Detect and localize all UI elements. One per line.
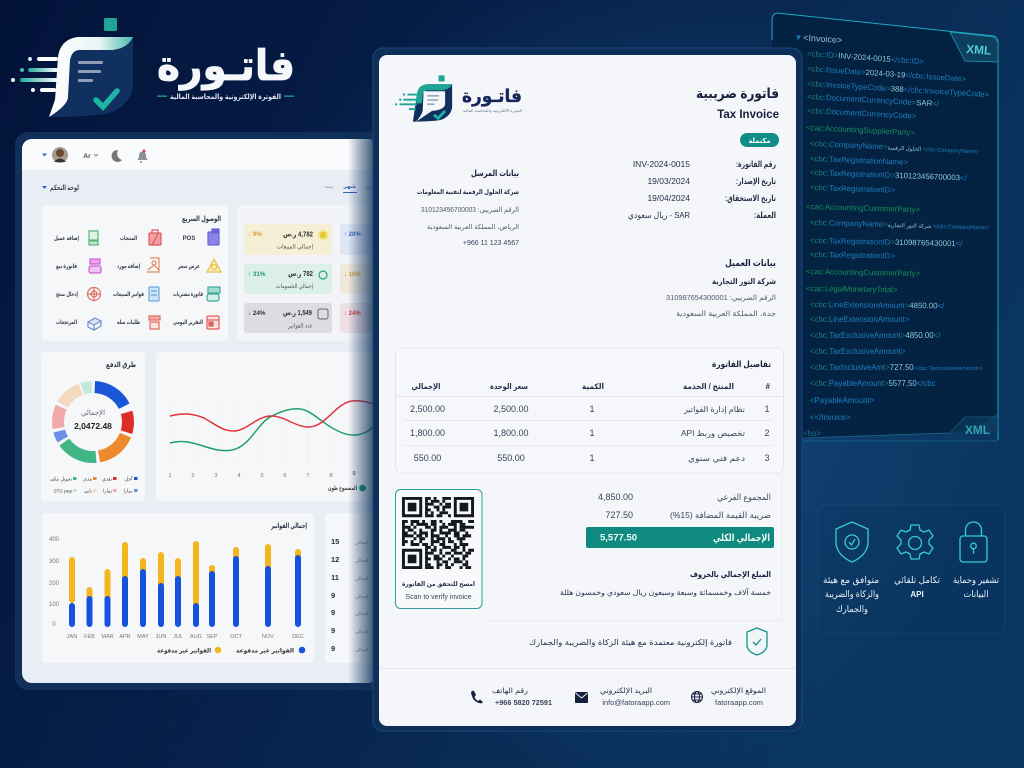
customer details: شركة النور التجارية xyxy=(712,277,776,286)
x axis months: APR xyxy=(119,634,131,640)
contact: phone xyxy=(471,686,552,707)
dashboard title row: سنة xyxy=(325,184,333,190)
xml tag bottom: XML xyxy=(965,423,990,437)
y axis xyxy=(49,537,60,628)
stat: total discounts: إجمالي الخصومات xyxy=(276,283,313,290)
chart x axis labels: 8 xyxy=(329,473,333,479)
wordmark: فاتـورة xyxy=(157,42,295,91)
x axis months: OCT xyxy=(230,634,242,640)
invoice items table: 1 xyxy=(589,404,595,414)
chart x axis labels: 1 xyxy=(168,473,172,479)
chart x axis labels: 7 xyxy=(306,473,310,479)
xml code lines: <cbc:TaxRegistrationName> xyxy=(810,154,909,167)
xml code lines: <cbc:CompanyName>شركة النور التجارية </cbc:CompanyName> xyxy=(810,218,989,231)
panel: quick access: الوصول السريع xyxy=(182,214,221,223)
stat: second column: ↓ 24% xyxy=(344,311,361,317)
y axis: 400 xyxy=(49,537,60,543)
customer details xyxy=(666,258,776,318)
status badge xyxy=(740,133,779,147)
panel: top customers list: 9 xyxy=(331,626,335,635)
y axis: 0 xyxy=(52,622,56,628)
panel: quick access: إضافة عميل xyxy=(54,235,79,242)
bar legend: الفواتير غير مدفوعة xyxy=(157,648,211,654)
invoice items table: سعر الوحدة xyxy=(490,382,528,391)
xml code lines: <cbc:IssueDate>2024-03-19</cbc:IssueDate> xyxy=(807,64,967,84)
compliance note xyxy=(529,628,767,655)
xml code lines: <cbc:LineExtensionAmount>4850.00</ xyxy=(810,300,945,310)
feature: zatca compliance: والزكاة والضريبة xyxy=(825,589,879,599)
stat: invoice count xyxy=(244,303,332,333)
invoice items table: 1 xyxy=(589,428,595,438)
invoice logo: فاتـورة xyxy=(462,86,522,107)
feature: zatca compliance: والجمارك xyxy=(836,604,868,614)
panel: security features xyxy=(818,505,1005,633)
xml code lines: <</Invoice> xyxy=(810,413,851,422)
stat: second column: ↑ 20% xyxy=(344,232,361,238)
chart x axis labels: 3 xyxy=(214,473,218,479)
customer details: الرقم الضريبي: 310987654300001 xyxy=(666,293,776,302)
stat: invoice count: 1,549 ر.س xyxy=(283,308,312,317)
qr code box: Scan to verify invoice xyxy=(405,594,472,601)
grand total bar: 5,577.50 xyxy=(600,532,637,542)
invoice items table: 1 xyxy=(764,404,770,414)
stat: total discounts xyxy=(244,264,332,294)
xml code lines: <cbc:TaxExclusiveAmount> xyxy=(810,347,906,356)
feature: zatca compliance xyxy=(823,522,879,614)
contact: website xyxy=(692,686,766,707)
panel: top customers list: 9 xyxy=(331,591,335,600)
xml code lines: <cac:AccountingSupplierParty> xyxy=(806,123,915,137)
y axis: 300 xyxy=(49,559,60,565)
x axis months: JUN xyxy=(156,634,166,640)
xml code lines: <cbc:TaxExclusiveAmount>4850.00</ xyxy=(810,331,941,340)
compliance note: فاتورة إلكترونية معتمدة مع هيئة الزكاة والضريبة والجمارك xyxy=(529,638,732,648)
panel: top customers list: إجمالي xyxy=(355,558,368,564)
x axis months: MAY xyxy=(137,634,149,640)
y axis: 200 xyxy=(49,581,60,587)
xml code lines: <cbc:PayableAmount>5577.50</cbc xyxy=(810,379,936,388)
invoice meta: رقم الفاتورة: xyxy=(736,159,776,170)
qr code box: امسح للتحقق من الفاتورة xyxy=(402,581,475,588)
stat: total sales: ↓ 9% xyxy=(248,231,262,238)
x axis months: JAN xyxy=(67,634,77,640)
feature: data encryption: البيانات xyxy=(964,589,988,599)
footer contacts xyxy=(471,686,766,707)
invoice meta: 19/03/2024 xyxy=(647,176,690,186)
xml code lines: <cac:AccountingCustomerParty> xyxy=(806,202,921,214)
line: red series xyxy=(170,401,378,431)
xml code lines: <cbc:TaxInclusiveAmt>727.50</cbc:TaxInclusiveAmount>/ xyxy=(810,363,983,372)
feature: api integration: تكامل تلقائي xyxy=(894,575,940,585)
invoice title: Tax Invoice xyxy=(717,109,779,121)
xml code lines: <cbc:LineExtensionAmount> xyxy=(810,315,910,324)
feature: data encryption: تشفير وحماية xyxy=(953,575,999,585)
sender details: الرياض، المملكة العربية السعودية xyxy=(427,223,519,231)
invoice items table: 3 xyxy=(764,453,770,463)
xml code lines: <cbc:DocumentCurrencyCode> xyxy=(807,106,917,121)
panel: top customers list: إجمالي xyxy=(355,540,368,546)
logo: fatoora brand xyxy=(11,18,295,117)
invoice meta: INV-2024-0015 xyxy=(633,159,690,169)
donut center total: الإجمالي xyxy=(81,410,105,417)
invoice meta: تاريخ الإصدار: xyxy=(736,176,776,187)
donut legend: STC pay xyxy=(53,488,73,494)
chart legend: المضموج طون xyxy=(328,485,357,492)
stat: total discounts: ↑ 31% xyxy=(248,271,266,278)
amount in words: خمسة آلاف وخمسمائة وسبعة وسبعون ريال سعودي وخمسون هللة xyxy=(560,587,771,597)
donut legend: نقدي xyxy=(102,476,112,482)
invoice meta xyxy=(628,159,776,220)
icon: small logo mark xyxy=(395,75,452,122)
customer details: جدة، المملكة العربية السعودية xyxy=(676,309,776,318)
feature: api integration: API xyxy=(910,590,924,599)
amount in words: المبلغ الإجمالي بالحروف xyxy=(690,570,771,579)
chart x axis labels: 4 xyxy=(237,473,241,479)
invoice meta: SAR - ريال سعودي xyxy=(628,210,690,220)
donut legend: تمارا xyxy=(103,488,113,494)
chart x axis labels: 5 xyxy=(260,473,264,479)
donut legend: تحويل بنكي xyxy=(50,476,73,482)
totals xyxy=(586,492,774,548)
donut legend: تمارا xyxy=(124,488,133,494)
panel: invoices bar chart xyxy=(42,513,314,663)
dashboard header xyxy=(22,139,377,170)
panel: quick access: POS xyxy=(183,236,195,242)
totals: 727.50 xyxy=(605,510,633,520)
stat: second column: ↓ 10% xyxy=(344,272,361,278)
panel: top customers list: 11 xyxy=(331,573,339,582)
status badge: مكتملة xyxy=(748,137,770,145)
customer details: بيانات العميل xyxy=(725,258,776,268)
contact: phone: رقم الهاتف xyxy=(492,686,528,695)
contact: email xyxy=(575,686,670,707)
panel: invoices bar chart: إجمالي الفواتير xyxy=(270,523,307,530)
contact: website: fatoraapp.com xyxy=(715,698,763,707)
contact: email: البريد الإلكتروني xyxy=(600,686,652,695)
tagline: الفوترة الإلكترونية والمحاسبة المالية xyxy=(170,93,281,101)
panel: xml code xyxy=(770,13,998,441)
chart x axis labels: 6 xyxy=(283,473,287,479)
dashboard title row: شهر xyxy=(343,184,356,190)
panel: quick access: طلبات سلة xyxy=(117,319,140,326)
icons: quick access xyxy=(88,229,221,330)
panel: top customers list: إجمالي xyxy=(355,629,368,635)
sender details xyxy=(417,168,519,247)
stat: invoice count: عدد الفواتير xyxy=(287,322,313,330)
x axis months: SEP xyxy=(206,634,218,640)
x axis months: NOV xyxy=(262,634,274,640)
panel: top customers list: إجمالي xyxy=(355,576,368,582)
x axis months: JUL xyxy=(173,634,183,640)
invoice meta: 19/04/2024 xyxy=(647,193,690,203)
stat: total sales: 4,782 ر.س xyxy=(283,230,313,238)
panel: quick access: التقرير اليومي xyxy=(173,319,203,326)
amount in words xyxy=(560,570,771,597)
totals: 4,850.00 xyxy=(598,492,633,502)
invoice items table: 2,500.00 xyxy=(410,404,445,414)
panel: quick access: فاتورة مشتريات xyxy=(173,291,203,298)
panel: quick access: المرتجعات xyxy=(56,319,77,326)
x axis months: FEB xyxy=(84,634,95,640)
xml code lines: <cbc:InvoiceTypeCode>388</cbc:InvoiceTypeCode> xyxy=(807,79,990,99)
xml code lines: <cbc:DocumentCurrencyCode>SAR</ xyxy=(807,92,940,108)
xml code lines: ▾ <Invoice> xyxy=(796,32,843,45)
panel: quick access: إدخال منتج xyxy=(56,291,78,298)
bars: unpaid xyxy=(72,544,298,606)
chart x axis labels: 9 xyxy=(352,471,356,477)
bar legend: الفواتير غير مدفوعة xyxy=(236,648,294,654)
contact: email: info@fatoraapp.com xyxy=(602,698,670,707)
stat: total sales xyxy=(244,224,332,255)
grand total bar xyxy=(586,527,774,548)
x axis months: MAR xyxy=(101,634,114,640)
panel: payment methods donut: طرق الدفع xyxy=(106,360,136,369)
panel: top customers list xyxy=(325,513,368,663)
panel: top customers list: 12 xyxy=(331,555,339,564)
x axis months: DEC xyxy=(292,634,304,640)
feature: data encryption xyxy=(953,522,999,599)
panel: top customers list: إجمالي xyxy=(355,647,368,653)
xml code lines: <cbc:TaxRegistrationID>31098765430001</ xyxy=(810,236,963,248)
donut legend: آجل xyxy=(124,476,133,482)
donut center total: 2,0472.48 xyxy=(74,421,112,431)
invoice items table: المنتج / الخدمة xyxy=(683,382,734,391)
invoice title: فاتورة ضريبية xyxy=(696,85,779,102)
dashboard title row xyxy=(42,184,374,193)
invoice items table: 550.00 xyxy=(414,453,441,463)
bar legend xyxy=(157,647,305,654)
x axis months xyxy=(66,634,304,638)
xml code lines: <cbc:CompanyName>الحلول الرقمية </cbc:CompanyName> xyxy=(810,139,979,155)
panel: top customers list: إجمالي xyxy=(355,594,368,600)
totals: المجموع الفرعي xyxy=(717,492,771,502)
icon: logo mark xyxy=(11,18,133,117)
dashboard title row: لوحة التحكم xyxy=(50,184,79,192)
invoice logo: الفوترة الإلكترونية والمحاسبة المالية xyxy=(463,108,522,114)
invoice items table: # xyxy=(766,382,771,391)
stat: total discounts: 782 ر.س xyxy=(288,269,313,278)
invoice items table: 1 xyxy=(589,453,595,463)
xml code lines: <cbc:TaxRegistrationID>310123456700003</ xyxy=(810,168,968,182)
invoice items table: نظام إدارة الفواتير xyxy=(683,405,745,415)
feature: zatca compliance: متوافق مع هيئة xyxy=(823,575,879,585)
invoice items table: تفاصيل الفاتورة xyxy=(712,359,771,370)
totals: ضريبة القيمة المضافة (15%) xyxy=(670,510,771,520)
xml code lines: <cac:LegalMonetaryTotal> xyxy=(806,284,898,294)
invoice items table: الإجمالي xyxy=(412,382,441,391)
invoice items table xyxy=(396,348,784,473)
donut center total xyxy=(74,410,112,431)
donut chart xyxy=(58,387,128,457)
invoice items table: 1,800.00 xyxy=(410,428,445,438)
y axis: 100 xyxy=(49,602,60,608)
invoice meta: تاريخ الاستحقاق: xyxy=(725,193,776,204)
invoice logo xyxy=(395,75,522,122)
grand total bar: الإجمالي الكلي xyxy=(713,533,770,544)
panel: quick access xyxy=(42,205,228,341)
dashboard header: Ar xyxy=(83,153,91,160)
panel: quick access: المنتجات xyxy=(120,235,137,242)
dashboard title row: يوم xyxy=(366,184,374,190)
panel: top customers list: 9 xyxy=(331,608,335,617)
stat: total sales: إجمالي المبيعات xyxy=(277,244,313,250)
xml code lines: <ho> xyxy=(803,429,821,438)
panel: payment methods donut xyxy=(41,352,145,501)
contact: website: الموقع الإلكتروني xyxy=(711,686,766,695)
chart x axis labels xyxy=(168,471,356,477)
invoice items table: دعم فني سنوي xyxy=(688,454,745,463)
sender details: الرقم الضريبي: 310123456700003 xyxy=(421,207,519,214)
x axis months: AUG xyxy=(190,634,202,640)
invoice title xyxy=(696,85,779,121)
qr code box xyxy=(396,490,482,608)
panel: quick access: فواتير المبيعات xyxy=(113,291,144,298)
invoice items table: الكمية xyxy=(582,382,604,391)
qr code xyxy=(402,497,474,569)
sender details: بيانات المرسل xyxy=(471,168,519,179)
panel: stat tiles xyxy=(237,205,370,341)
donut legend: تابي xyxy=(84,488,93,494)
icon: shield check xyxy=(747,628,767,655)
xml tag bottom xyxy=(950,417,998,437)
xml code lines xyxy=(796,32,990,438)
invoice meta: العملة: xyxy=(754,210,776,220)
xml tag top xyxy=(950,32,998,62)
invoice items table: تخصيص وربط API xyxy=(681,429,745,438)
panel: quick access: إضافة مورد xyxy=(117,263,140,270)
sender details: +966 11 123 4567 xyxy=(463,240,519,247)
xml code lines: <cac:AccountingCustomerParty> xyxy=(806,267,921,278)
chart x axis labels: 2 xyxy=(191,473,195,479)
panel: quick access: عرض سعر xyxy=(177,264,200,270)
panel: top customers list: إجمالي xyxy=(355,611,368,617)
panel: invoice xyxy=(373,48,802,731)
invoice items table: 2 xyxy=(764,428,770,438)
xml code lines: <PayableAmount> xyxy=(810,396,875,405)
feature: api integration xyxy=(894,525,940,599)
xml code lines: <cbc:TaxRegistrationID> xyxy=(810,250,896,260)
invoice items table: 1,800.00 xyxy=(493,428,529,438)
panel: quick access: فاتورة بيع xyxy=(56,263,77,270)
line: green series xyxy=(170,409,378,451)
xml code lines: <cbc:TaxRegistrationID> xyxy=(810,183,896,195)
panel: top customers list: 15 xyxy=(331,537,339,546)
stat: invoice count: ↓ 24% xyxy=(248,310,266,317)
contact: phone: +966 5820 72591 xyxy=(495,698,552,707)
donut legend: مدى xyxy=(83,476,92,482)
invoice items table: 2,500.00 xyxy=(493,404,529,414)
sender details: شركة الحلول الرقمية لتقنية المعلومات xyxy=(417,189,519,196)
stat: second column xyxy=(340,224,371,333)
xml code lines: <cbc:ID>INV-2024-0015</cbc:ID> xyxy=(807,49,925,66)
panel: line chart xyxy=(156,352,386,501)
xml tag top: XML xyxy=(966,42,992,58)
invoice items table: 550.00 xyxy=(497,453,525,463)
panel: dashboard xyxy=(15,132,387,690)
bars: paid xyxy=(72,558,298,624)
donut legend xyxy=(50,476,138,494)
panel: top customers list: 9 xyxy=(331,644,335,653)
